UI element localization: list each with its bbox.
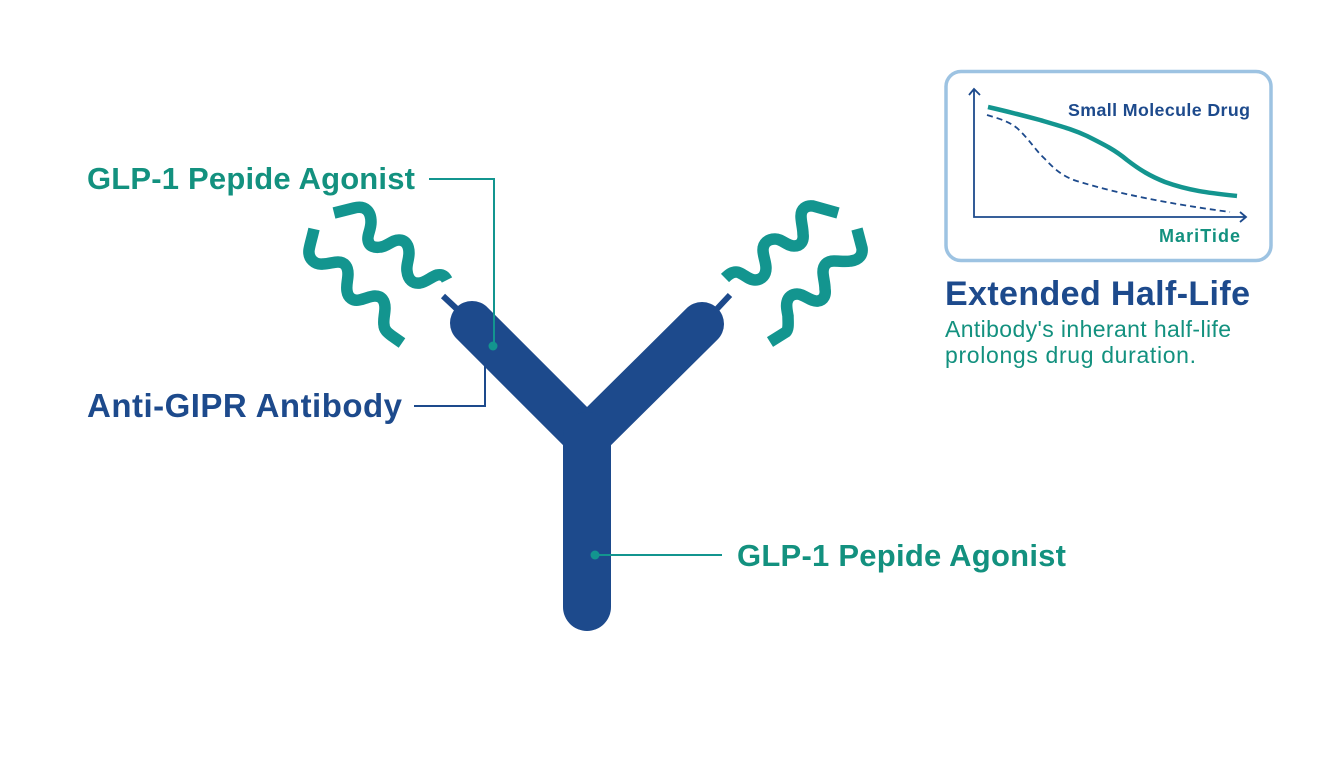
description text [945,316,1231,368]
curve label: Small Molecule Drug: Small Molecule Drug [1068,100,1250,120]
label: GLP-1 Pepide Agonist (top): GLP-1 Pepide Agonist [87,161,415,196]
label: GLP-1 Pepide Agonist (stem) [590,538,1066,573]
label: GLP-1 Pepide Agonist (stem): GLP-1 Pepide Agonist [737,538,1066,573]
label: Anti-GIPR Antibody: Anti-GIPR Antibody [87,387,403,424]
peptide wave: upper right [725,206,838,280]
curve: MariTide solid [988,107,1237,196]
peptide wave: upper left [334,207,447,283]
label: Anti-GIPR Antibody [87,365,485,424]
label: GLP-1 Pepide Agonist (top) [87,161,498,350]
curve label: MariTide: MariTide [1159,226,1240,246]
curve: small molecule dashed [987,115,1230,212]
panel: half-life chart [946,72,1271,260]
heading: Extended Half-Life: Extended Half-Life [945,275,1250,313]
antibody Y shape [443,295,730,607]
chart axes [969,89,1246,222]
peptide wave: lower left [309,229,402,343]
description text: prolongs drug duration. [945,342,1196,368]
peptide wave: lower right [770,229,862,342]
description text: Antibody's inherant half-life [945,316,1231,342]
